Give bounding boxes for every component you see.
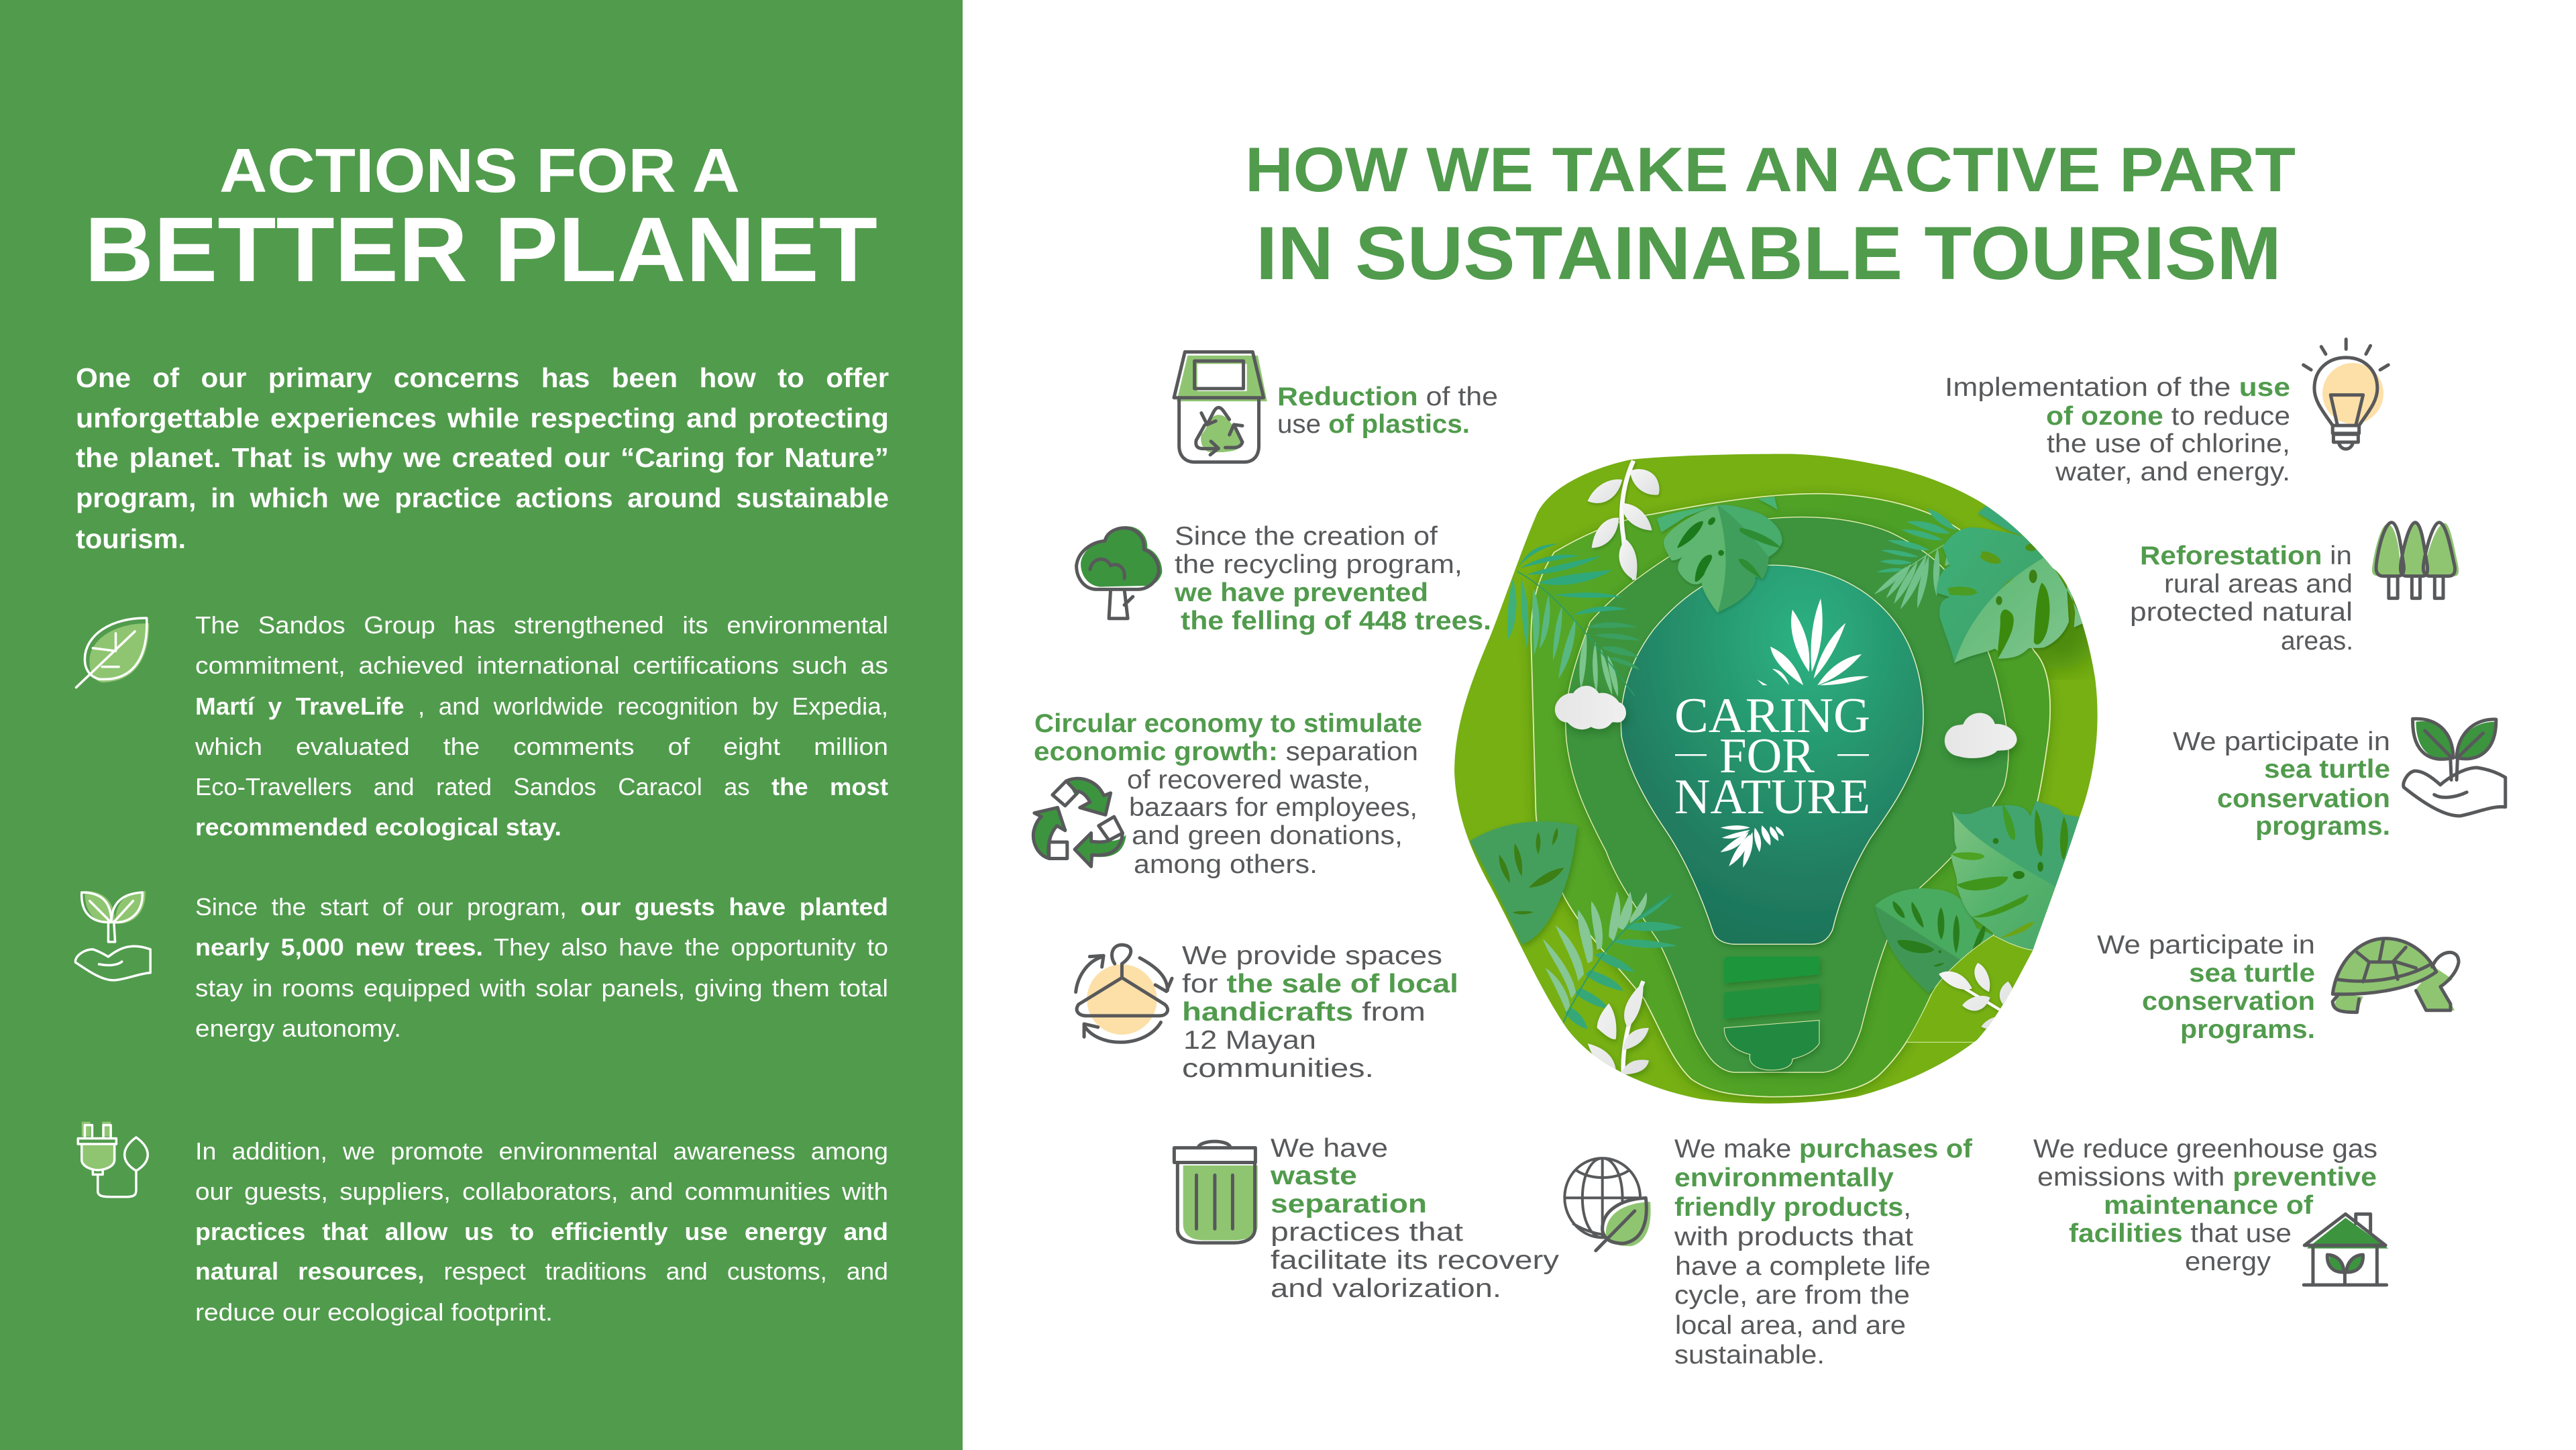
- text: handicrafts: [1182, 941, 1458, 1083]
- text: handicrafts: communities.: [1182, 1054, 1374, 1083]
- palm frond bottom: [1543, 891, 1682, 1029]
- heading: how we take an active part: IN SUSTAINABLE TOURISM: [1256, 211, 2282, 295]
- heading: how we take an active part: HOW WE TAKE AN ACTIVE PART: [1245, 134, 2296, 205]
- text: we participate 2: We participate in: [2097, 931, 2315, 960]
- text: waste separation: waste: [1270, 1161, 1357, 1190]
- heading: actions for a better planet: [85, 136, 877, 301]
- text: trees saved: the recycling program,: [1175, 550, 1462, 579]
- paper layers and bulb: [1470, 494, 2101, 1097]
- text: waste separation: We have: [1271, 1134, 1388, 1163]
- text: purchases: environmentally: [1674, 1163, 1894, 1192]
- text: ozone: water, and energy.: [2055, 458, 2290, 486]
- inner paper layer: [1566, 517, 2008, 1072]
- logo text: caring for nature: CARING: [1674, 688, 1870, 743]
- palm frond top right: [1874, 509, 1956, 609]
- text block: guests planted trees: [195, 893, 888, 1042]
- text: we participate 2: programs.: [2180, 1015, 2315, 1044]
- text: waste separation: [1270, 1134, 1560, 1303]
- text: trees saved: the felling of 448 trees.: [1181, 607, 1491, 635]
- text: waste separation: separation: [1271, 1190, 1427, 1219]
- text block: intro paragraph: unforgettable experiences while respecting and protecting: [76, 403, 889, 433]
- text: greenhouse gas: We reduce greenhouse gas: [2033, 1135, 2377, 1163]
- text: reforestation: areas.: [2281, 627, 2353, 656]
- text: ozone: the use of chlorine,: [2047, 429, 2290, 458]
- text block: environmental awareness: our guests, suppliers, collaborators, and communities with: [195, 1178, 888, 1205]
- text: ozone: of ozone to reduce: [2046, 402, 2290, 431]
- logo text: caring for nature: [1674, 688, 1870, 825]
- text block: sandos group: The Sandos Group has strengthened its environmental: [195, 611, 888, 639]
- icon: plant on hand: [2404, 719, 2506, 816]
- central illustration: light bulb in paper-cut jungle: [1442, 429, 2113, 1141]
- text: trees saved: [1174, 522, 1491, 635]
- text: we participate 1: sea turtle: [2264, 755, 2390, 784]
- text: trees saved: we have prevented: [1174, 578, 1428, 607]
- text: ozone: Implementation of the use: [1945, 373, 2290, 402]
- text: handicrafts: 12 Mayan: [1183, 1026, 1316, 1055]
- icon: three trees: [2372, 523, 2459, 599]
- text: trees saved: Since the creation of: [1175, 522, 1438, 551]
- text: handicrafts: for the sale of local: [1182, 970, 1458, 998]
- text: we participate 2: [2097, 931, 2315, 1044]
- icon: hanger: [1076, 945, 1172, 1042]
- icon: tree: [1077, 526, 1162, 619]
- text: waste separation: facilitate its recovery: [1271, 1246, 1560, 1275]
- text block: sandos group: commitment, achieved international certifications such as: [195, 652, 888, 679]
- leaf left: [1470, 821, 1577, 945]
- monstera leaf lower small: [1875, 888, 1994, 993]
- icon: eco house: [2304, 1214, 2388, 1285]
- text: reduction of plastics: [1277, 382, 1498, 439]
- text block: guests planted trees: energy autonomy.: [195, 1015, 401, 1042]
- text block: sandos group: recommended ecological stay.: [195, 813, 561, 841]
- text block: sandos group: Martí y TraveLife , and worldwide recognition by Expedia,: [195, 692, 888, 720]
- icon: recycling arrows: [1033, 778, 1126, 868]
- text block: guests planted trees: nearly 5,000 new trees. They also have the opportunity to: [195, 933, 888, 961]
- text: we participate 1: conservation: [2217, 784, 2390, 813]
- text: purchases: local area, and are: [1675, 1311, 1906, 1340]
- text: handicrafts: We provide spaces: [1182, 941, 1442, 970]
- logo text: caring for nature: FOR: [1719, 729, 1815, 784]
- text block: environmental awareness: practices that allow us to efficiently use energy and: [195, 1218, 888, 1245]
- text block: environmental awareness: In addition, we promote environmental awareness among: [195, 1137, 888, 1165]
- logo leaves bottom: [1721, 825, 1784, 868]
- monstera leaf lower large: [1951, 800, 2082, 951]
- text: purchases: [1674, 1135, 1973, 1369]
- text: reduction of plastics: use of plastics.: [1277, 410, 1470, 439]
- icon: plug with leaf: [78, 1122, 148, 1197]
- monstera leaf top: [1657, 497, 1782, 613]
- icon: plant in hand: [75, 891, 150, 980]
- icon: waste bin: [1174, 1141, 1258, 1243]
- text block: sandos group: [195, 611, 888, 841]
- text block: intro paragraph: [76, 362, 889, 554]
- text: waste separation: and valorization.: [1271, 1274, 1501, 1303]
- text: purchases: sustainable.: [1674, 1341, 1825, 1369]
- text: purchases: friendly products ,: [1674, 1193, 1911, 1222]
- panel: left green column: [0, 0, 963, 1450]
- text block: environmental awareness: natural resources, respect traditions and customs, and: [195, 1257, 888, 1285]
- white sprig bottom right: [1939, 963, 2014, 1029]
- white sprig top: [1588, 461, 1660, 580]
- icon: leaf: [76, 618, 149, 688]
- text: circular economy: Circular economy to stimulate: [1034, 709, 1422, 738]
- heading: actions for a better planet: ACTIONS FOR A: [219, 136, 740, 205]
- outer blob: [1454, 454, 2098, 1104]
- text: purchases: We make purchases of: [1674, 1135, 1973, 1163]
- palm frond top left: [1507, 543, 1642, 696]
- logo text: caring for nature: NATURE: [1674, 770, 1870, 825]
- text: circular economy: economic growth: separation: [1034, 737, 1418, 766]
- text: circular economy: [1034, 709, 1422, 879]
- clouds: [1555, 686, 2017, 758]
- text: we participate 1: [2173, 727, 2390, 841]
- bulb glass: [1621, 565, 1923, 944]
- logo leaves top: [1757, 599, 1869, 685]
- text: purchases: cycle, are from the: [1674, 1281, 1910, 1310]
- text: circular economy: and green donations,: [1132, 821, 1403, 850]
- text: greenhouse gas: energy: [2185, 1247, 2271, 1276]
- text block: intro paragraph: One of our primary concerns has been how to offer: [76, 362, 889, 393]
- text block: sandos group: Eco-Travellers and rated Sandos Caracol as the most: [195, 773, 888, 800]
- text block: sandos group: which evaluated the comments of eight million: [195, 733, 888, 760]
- text: we participate 2: sea turtle: [2189, 959, 2315, 988]
- icon: light bulb: [2304, 340, 2388, 449]
- text: reduction of plastics: Reduction of the: [1277, 382, 1498, 411]
- text: ozone: [1945, 373, 2290, 486]
- text: greenhouse gas: facilities that use: [2069, 1219, 2292, 1248]
- icon: recycling container: [1174, 352, 1267, 462]
- text: reforestation: protected natural: [2130, 598, 2353, 627]
- text block: intro paragraph: the planet. That is why we created our “Caring for Nature”: [76, 442, 889, 473]
- text block: guests planted trees: stay in rooms equipped with solar panels, giving them total: [195, 974, 888, 1002]
- text: greenhouse gas: emissions with preventive: [2037, 1163, 2377, 1192]
- text block: intro paragraph: program, in which we practice actions around sustainable: [76, 482, 889, 513]
- text block: environmental awareness: reduce our ecological footprint.: [195, 1298, 553, 1326]
- text: we participate 1: programs.: [2255, 812, 2390, 841]
- icon: globe with leaf: [1564, 1158, 1651, 1251]
- middle paper layer: [1531, 494, 2050, 1097]
- icon: turtle: [2332, 939, 2459, 1013]
- text: reforestation: Reforestation in: [2140, 541, 2352, 570]
- text: purchases: have a complete life: [1675, 1252, 1931, 1281]
- text block: environmental awareness: [195, 1137, 888, 1326]
- heading: actions for a better planet: BETTER PLANET: [85, 199, 877, 301]
- text: greenhouse gas: maintenance of: [2104, 1191, 2314, 1220]
- text: greenhouse gas: [2033, 1135, 2377, 1276]
- text: we participate 1: We participate in: [2173, 727, 2390, 756]
- white sprig bottom left: [1588, 981, 1649, 1084]
- bulb base segments: [1724, 957, 1819, 1070]
- text block: intro paragraph: tourism.: [76, 523, 186, 554]
- foreground bright paper layer: [1907, 935, 2033, 1043]
- text: we participate 2: conservation: [2142, 987, 2315, 1016]
- text: purchases: with products that: [1674, 1223, 1913, 1251]
- text: circular economy: of recovered waste,: [1127, 766, 1371, 794]
- heading: how we take an active part: [1245, 134, 2296, 295]
- text: circular economy: among others.: [1134, 850, 1318, 879]
- text: reforestation: rural areas and: [2164, 570, 2353, 599]
- text: handicrafts: handicrafts from: [1182, 998, 1426, 1027]
- text: reforestation: [2130, 541, 2353, 656]
- monstera leaf top right: [1937, 506, 2084, 663]
- text: circular economy: bazaars for employees,: [1129, 793, 1417, 822]
- text block: guests planted trees: Since the start of our program, our guests have planted: [195, 893, 888, 921]
- text: waste separation: practices that: [1271, 1218, 1463, 1247]
